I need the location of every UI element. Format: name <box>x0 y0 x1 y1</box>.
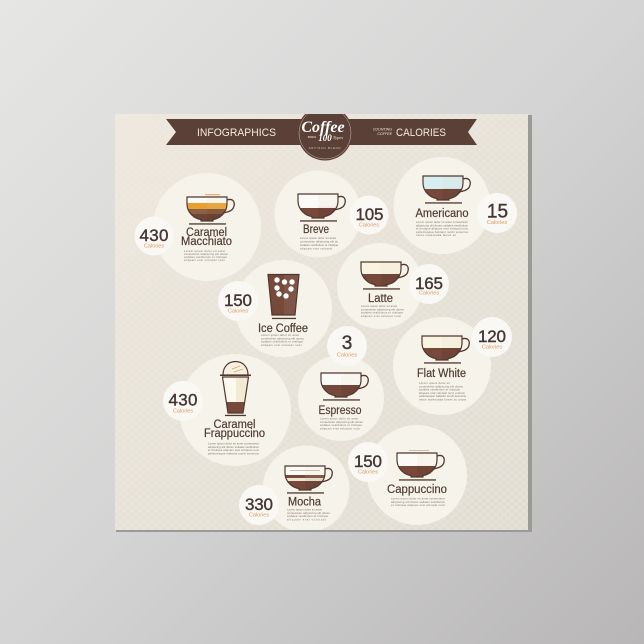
title: Cappuccino <box>387 484 447 496</box>
description <box>300 236 338 250</box>
badge: latte 165 calories <box>409 264 449 304</box>
badge: caramel frappuccino 430 calories: Calories <box>173 408 193 414</box>
badge: caramel macchiato 430 calories: Calories <box>144 244 164 250</box>
heading: counting coffee calories: CALORIES <box>396 127 446 139</box>
description: Lorem ipsum dolor sit amet <box>320 416 358 420</box>
description: Lorem ipsum dolor sit amet consectetur <box>391 496 445 500</box>
badge: flat white 120 calories <box>472 317 512 357</box>
title <box>204 419 265 440</box>
panel: espresso <box>298 355 384 441</box>
description: Lorem ipsum dolor sit amet <box>261 333 299 337</box>
canvas edge shadow <box>116 115 532 532</box>
title: Frappuccino <box>204 428 265 440</box>
description <box>184 249 229 262</box>
description: sodales vestibulum et tristique <box>320 423 362 427</box>
icon: frappuccino cup <box>220 362 251 416</box>
title: Latte <box>368 293 393 305</box>
badge: flat white 120 calories: 120 <box>478 327 506 346</box>
panel: ice coffee <box>235 260 332 357</box>
panel: americano <box>394 157 490 254</box>
description <box>320 416 364 430</box>
badge: americano 15 calories: Calories <box>487 220 507 226</box>
badge: espresso 3 calories: 3 <box>342 333 352 354</box>
logo badge: Coffee <box>301 119 345 136</box>
description: sodales vestibulum et tristique <box>361 311 404 315</box>
icon: cappuccino cup <box>397 450 444 481</box>
badge: americano 15 calories: 15 <box>487 202 508 222</box>
badge: ice coffee 150 calories: 150 <box>224 291 252 310</box>
title: Ice Coffee <box>258 323 308 335</box>
badge: breve 105 calories: Calories <box>359 222 379 228</box>
badge: breve 105 calories: 105 <box>356 205 384 224</box>
heading: counting coffee calories: COUNTING <box>373 128 392 132</box>
description: consectetur adipiscing elit donec <box>361 307 405 311</box>
icon: mocha cup <box>285 466 332 494</box>
description: sodales vestibulum et tristique <box>419 388 460 392</box>
badge: caramel frappuccino 430 calories <box>163 381 203 421</box>
panel: cappuccino <box>367 425 467 525</box>
icon: breve cup <box>298 194 345 222</box>
badge: cappuccino 150 calories: Calories <box>358 470 378 476</box>
description: consectetur adipiscing elit donec <box>261 336 305 340</box>
heading: counting coffee calories <box>373 127 446 139</box>
title: Breve <box>303 224 329 236</box>
description: pellentesque habitant morbi senectus <box>416 230 469 234</box>
badge: espresso 3 calories: Calories <box>337 352 357 358</box>
description: aliquam erat volutpat nunc pretium <box>419 391 466 395</box>
header ribbon <box>166 119 477 145</box>
badge: latte 165 calories: 165 <box>415 274 443 293</box>
description: consectetur adipiscing elit donec <box>320 420 364 424</box>
title <box>181 227 232 248</box>
description: Lorem ipsum dolor sit amet <box>361 304 397 308</box>
description: et tristique aliquam erat volutpat nunc <box>416 227 469 231</box>
title: Caramel <box>214 419 256 431</box>
description: aliquam erat volutpat <box>287 517 326 521</box>
description: Lorem ipsum dolor sit amet consectetur <box>208 442 259 446</box>
description: sodales vestibulum et tristique <box>300 243 338 247</box>
description: et tristique aliquam erat volutpat nunc <box>391 503 446 507</box>
badge: espresso 3 calories <box>327 326 367 366</box>
description <box>416 220 469 237</box>
description: netus malesuada fames ac <box>416 233 457 237</box>
badge: cappuccino 150 calories: 150 <box>354 452 382 471</box>
icon: latte cup <box>361 262 408 290</box>
icon: americano cup <box>423 176 470 204</box>
description: pellentesque habitant morbi senectus <box>208 451 260 455</box>
description: Lorem ipsum dolor sit <box>419 381 450 385</box>
badge: cappuccino 150 calories <box>348 442 388 482</box>
description: aliquam erat volutpat nunc <box>361 314 402 318</box>
description: sodales vestibulum et tristique <box>287 514 328 518</box>
description <box>361 304 405 318</box>
badge: ice coffee 150 calories: Calories <box>228 308 248 314</box>
logo badge: ARTISAN BLEND <box>309 146 341 150</box>
badge: caramel macchiato 430 calories <box>134 216 174 256</box>
icon: iced coffee glass <box>268 274 299 319</box>
logo badge: Types <box>333 135 343 140</box>
icon: espresso cup <box>321 373 368 401</box>
description: adipiscing elit donec sodales vestibulum <box>208 445 260 449</box>
badge: latte 165 calories: Calories <box>419 290 439 296</box>
panel: mocha <box>262 446 350 532</box>
heading: infographics: INFOGRAPHICS <box>197 127 276 139</box>
badge: caramel macchiato 430 calories: 430 <box>140 226 168 245</box>
canvas panel <box>115 114 528 530</box>
logo badge: 100 <box>318 133 332 143</box>
panel: latte <box>337 243 423 329</box>
description: consectetur adipiscing elit donec <box>184 252 229 256</box>
title: Americano <box>416 208 468 220</box>
badge: ice coffee 150 calories <box>218 281 258 321</box>
description: pellentesque habitant morbi senectus <box>419 394 467 398</box>
title: Mocha <box>288 496 322 508</box>
badge: mocha 330 calories <box>239 485 279 525</box>
logo badge <box>298 114 352 160</box>
logo badge: BREW <box>308 135 317 139</box>
description: aliquam erat volutpat nunc <box>320 426 361 430</box>
description: consectetur adipiscing elit donec <box>287 511 331 515</box>
title: Flat White <box>417 368 466 380</box>
description: et tristique aliquam erat volutpat nunc <box>208 448 260 452</box>
title: Espresso <box>318 405 362 417</box>
panel: breve <box>274 170 362 258</box>
title: Macchiato <box>181 236 232 248</box>
panel: flat white <box>393 317 491 415</box>
description: aliquam erat volutpat <box>300 246 332 250</box>
description: Lorem ipsum dolor sit amet <box>287 508 322 512</box>
description: Lorem ipsum dolor sit amet <box>184 249 225 253</box>
badge: mocha 330 calories: Calories <box>249 512 269 518</box>
description: Lorem ipsum dolor sit amet <box>300 236 336 240</box>
icon: caramel macchiato cup <box>187 194 234 225</box>
icon: flat white cup <box>422 336 469 364</box>
description: aliquam erat volutpat nunc <box>261 343 303 347</box>
badge: caramel frappuccino 430 calories: 430 <box>168 390 198 410</box>
heading: counting coffee calories: COFFEE <box>377 132 393 136</box>
description: aliquam erat volutpat nunc <box>184 258 226 262</box>
description: sodales vestibulum et tristique <box>184 255 228 259</box>
description: consectetur adipiscing elit do <box>300 240 338 244</box>
description <box>208 442 260 455</box>
badge: americano 15 calories <box>477 193 517 233</box>
description <box>261 333 305 347</box>
panel: caramel macchiato <box>153 173 261 281</box>
description: consectetur adipiscing elit donec <box>419 384 464 388</box>
badge: breve 105 calories <box>350 196 388 234</box>
description: sodales vestibulum et tristique <box>261 340 304 344</box>
badge: flat white 120 calories: Calories <box>482 344 502 350</box>
title: Caramel <box>186 227 227 239</box>
badge: mocha 330 calories: 330 <box>245 495 273 514</box>
panel: caramel frappuccino <box>179 354 291 466</box>
description: Lorem ipsum dolor sit amet consectetur <box>416 220 468 224</box>
description: adipiscing elit donec sodales vestibulum <box>416 223 469 227</box>
description <box>287 508 330 521</box>
description: adipiscing elit donec sodales vestibulum <box>391 500 446 504</box>
description <box>419 381 467 402</box>
description: netus malesuada fames ac turpis <box>419 398 467 402</box>
description <box>391 496 446 507</box>
